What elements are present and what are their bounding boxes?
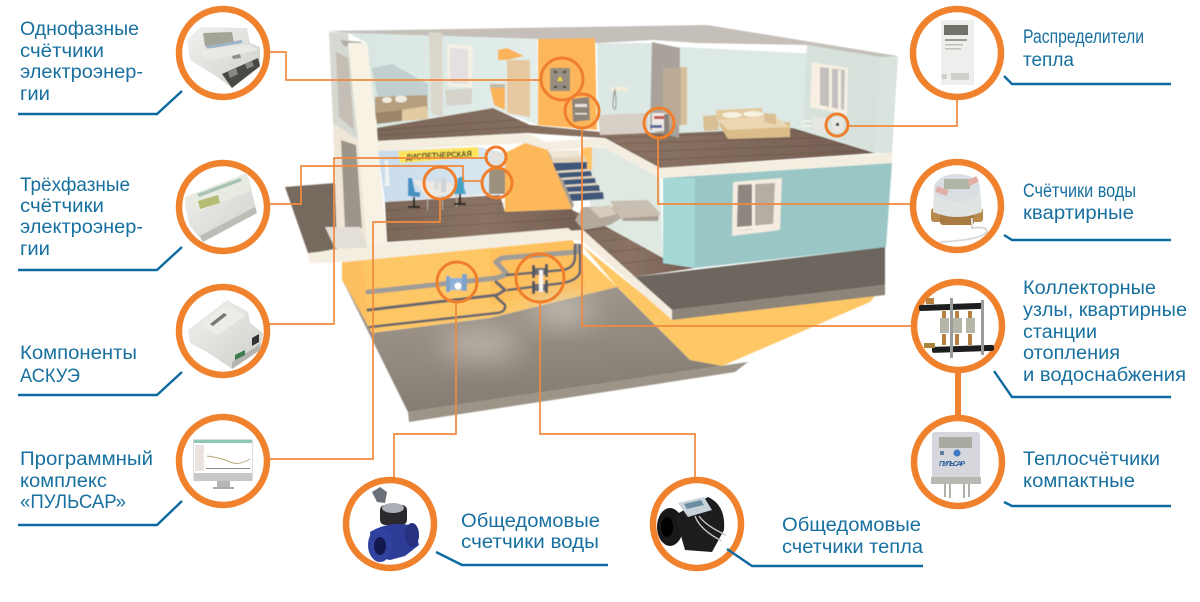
line: three-phase meters to office box xyxy=(268,166,483,204)
icon: building water meter xyxy=(346,480,434,568)
basement concrete floor xyxy=(342,279,748,422)
label: building heat meters: счетчики тепла xyxy=(782,537,923,558)
circle: computer xyxy=(424,167,456,199)
upper floor rooms xyxy=(329,25,898,153)
label: AMR components: АСКУЭ xyxy=(20,366,80,387)
label: heat allocators: Распределители xyxy=(1023,27,1144,48)
label: compact heat meters: Теплосчётчики xyxy=(1023,449,1160,470)
electrical panel xyxy=(550,68,590,122)
label: compact heat meters: компактные xyxy=(1023,471,1135,492)
icon: single-phase meter xyxy=(179,9,267,97)
circle: sensor xyxy=(486,147,506,167)
label: PULSAR software: Программный xyxy=(20,449,153,470)
line: software to computer xyxy=(268,199,440,459)
line: heat allocator xyxy=(848,100,957,126)
thick connector between collector and heat meter xyxy=(955,368,961,418)
label: heat allocators xyxy=(1004,27,1171,84)
label: AMR components xyxy=(18,343,182,395)
circle: basement water meter xyxy=(437,262,477,302)
line: apartment water meter xyxy=(658,138,913,204)
icon: apartment water meter xyxy=(913,162,1001,250)
ground floor wall beside stairs xyxy=(582,147,663,258)
basement pipes xyxy=(368,245,580,327)
label: single-phase meters: гии xyxy=(20,84,50,105)
icon: compact heat meter xyxy=(914,418,1002,506)
label: apartment water meters: квартирные xyxy=(1023,203,1134,224)
heat allocator on radiator xyxy=(832,117,843,132)
circle: basement heat meter xyxy=(516,254,564,302)
left exterior walls xyxy=(325,32,387,250)
office desk and chairs xyxy=(385,160,466,210)
label: building water meters: Общедомовые xyxy=(461,511,600,532)
left bedroom furniture xyxy=(372,32,530,124)
label: collector units xyxy=(994,278,1187,397)
circle: office cabinet xyxy=(482,168,512,198)
label: three-phase meters: электроэнер- xyxy=(20,217,143,238)
label: building heat meters xyxy=(727,515,923,566)
collector in bathroom xyxy=(650,113,669,135)
label: AMR components: Компоненты xyxy=(20,343,137,364)
label: collector units: станции xyxy=(1023,322,1097,343)
house cutaway illustration xyxy=(285,25,898,422)
icon: building heat meter xyxy=(653,480,741,568)
label: apartment water meters xyxy=(1004,181,1171,240)
slab above basement xyxy=(308,228,583,263)
basement meters xyxy=(446,264,548,294)
circle: switchboard xyxy=(565,94,599,128)
icon: three-phase meter xyxy=(179,163,267,251)
stairs xyxy=(548,150,660,230)
upper floor wood xyxy=(370,108,880,168)
label: PULSAR software: комплекс xyxy=(20,471,107,492)
line: building heat meter xyxy=(540,302,695,478)
line: AMR components to sensor xyxy=(268,158,486,324)
label: building heat meters: Общедомовые xyxy=(782,515,921,536)
terrace wood and gravel xyxy=(560,210,885,320)
label: apartment water meters: Счётчики воды xyxy=(1023,181,1136,202)
label: three-phase meters: гии xyxy=(20,239,50,260)
label: building water meters xyxy=(436,511,608,565)
label: three-phase meters xyxy=(18,175,182,270)
floor slab cream edge xyxy=(378,133,892,178)
label: three-phase meters: Трёхфазные xyxy=(20,175,130,196)
line: building water meter xyxy=(394,302,456,478)
ground floor office xyxy=(378,143,600,242)
label: three-phase meters: счётчики xyxy=(20,196,104,217)
connector lines xyxy=(268,52,958,478)
icon: heat allocator xyxy=(913,9,1001,97)
line: collector to switchboard xyxy=(582,128,913,326)
label: building water meters: счетчики воды xyxy=(461,532,599,553)
dispatcher sign: ДИСПЕТЧЕРСКАЯ xyxy=(406,149,472,162)
label: single-phase meters xyxy=(18,19,182,114)
label: collector units: Коллекторные xyxy=(1023,278,1156,299)
label: collector units: узлы, квартирные xyxy=(1023,300,1187,321)
circle: heat allocator xyxy=(826,114,848,136)
label: single-phase meters: электроэнер- xyxy=(20,62,143,83)
right rooms furniture xyxy=(597,42,848,139)
icon: monitor with software xyxy=(179,417,267,505)
label: single-phase meters: Однофазные xyxy=(20,19,139,40)
label: PULSAR software xyxy=(18,449,182,525)
label: PULSAR software: «ПУЛЬСАР» xyxy=(20,492,126,513)
teal exterior wall xyxy=(663,163,892,268)
circle: panel xyxy=(541,58,583,100)
icon: compact heat meter: ПУЛЬСАР xyxy=(939,461,965,468)
icon: AMR component module xyxy=(179,287,267,375)
left gravel balcony xyxy=(285,183,368,263)
label: collector units: и водоснабжения xyxy=(1023,365,1186,386)
icon: collector manifold xyxy=(914,282,1002,370)
exterior window xyxy=(732,178,782,236)
label: compact heat meters xyxy=(1004,449,1171,506)
label: single-phase meters: счётчики xyxy=(20,41,104,62)
label: heat allocators: тепла xyxy=(1023,50,1074,71)
small highlight circles xyxy=(424,58,848,302)
circle: bathroom collector xyxy=(644,108,674,138)
line: single-phase meters to panel xyxy=(270,52,541,80)
basement walls xyxy=(342,240,875,366)
label: collector units: отопления xyxy=(1023,343,1120,364)
